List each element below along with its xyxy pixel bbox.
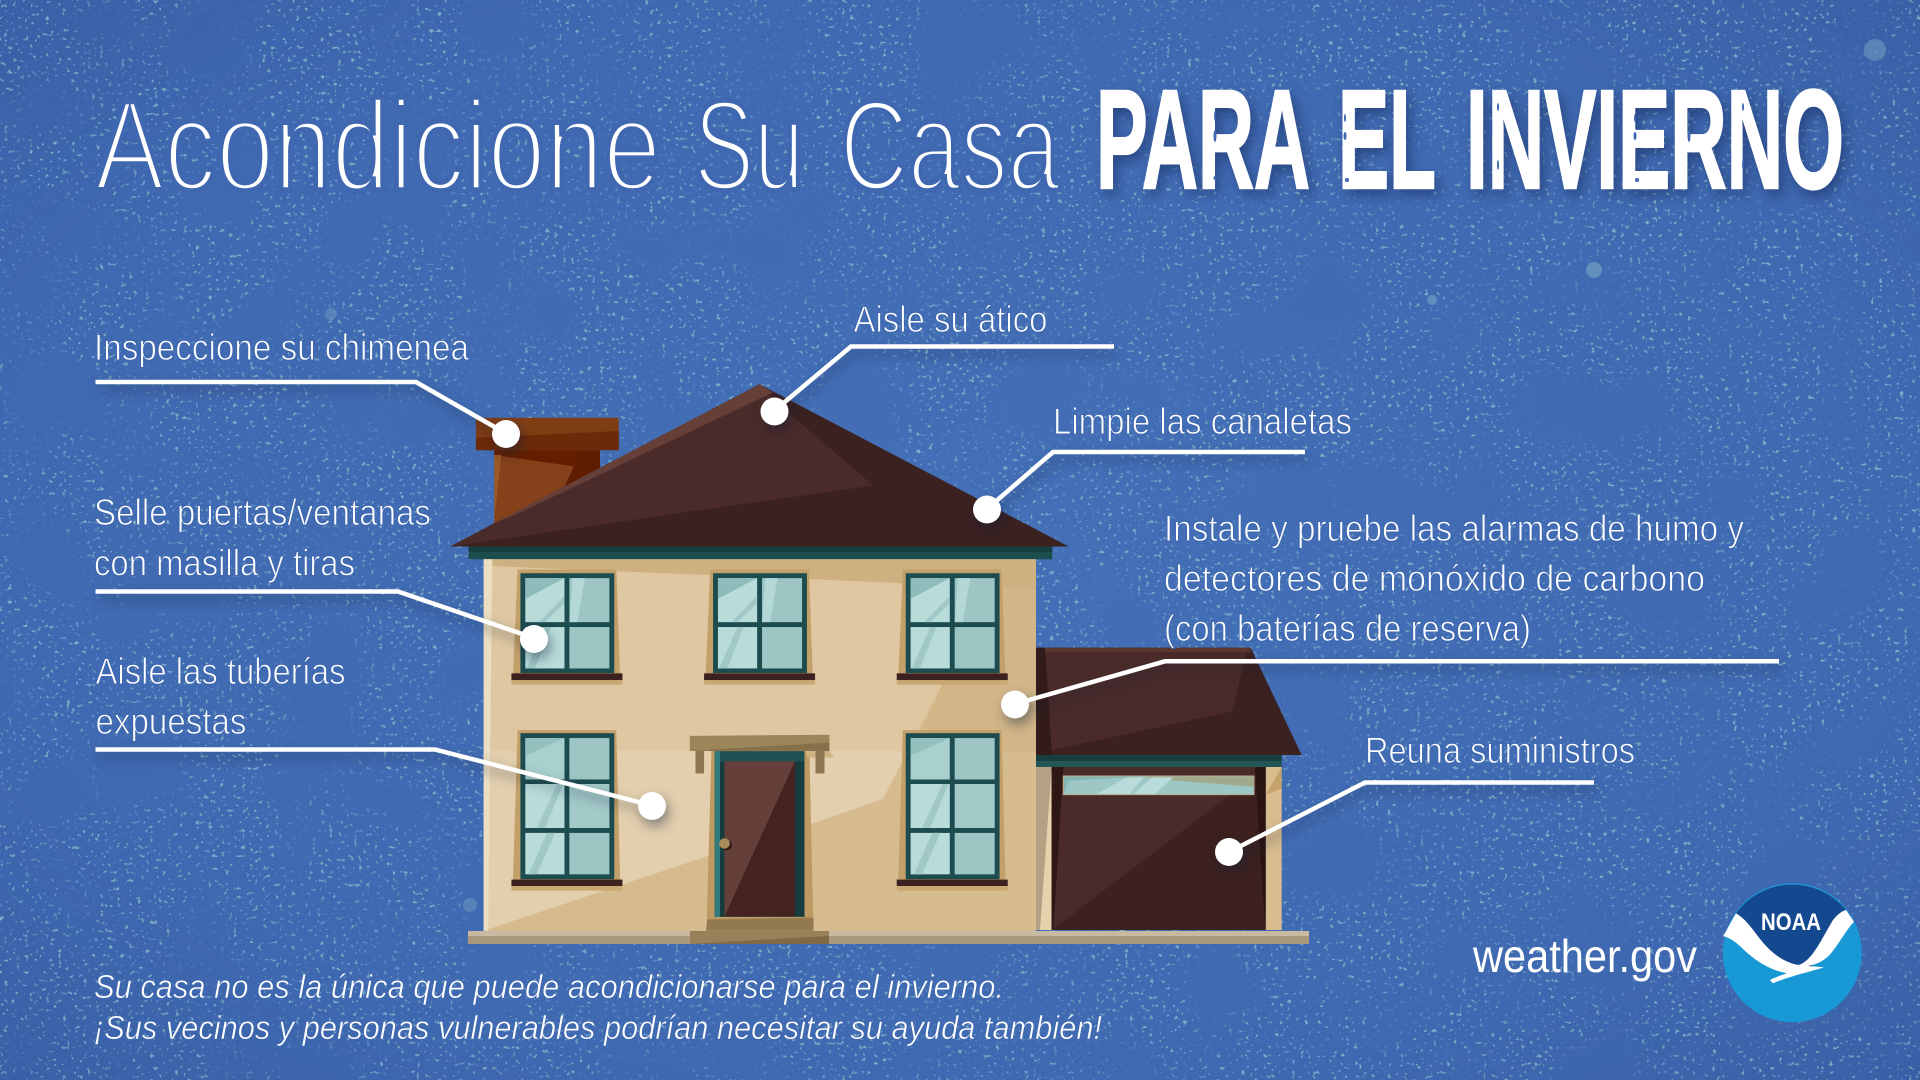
label: Aisle su ático xyxy=(854,299,1048,340)
garage window xyxy=(1063,776,1254,795)
eave band xyxy=(469,547,1052,559)
leader and dot xyxy=(1001,661,1779,718)
garage door xyxy=(1052,767,1266,930)
website: weather.gov xyxy=(1472,930,1697,982)
leader and dot xyxy=(760,346,1114,426)
foundation xyxy=(468,931,1309,944)
callout: attic xyxy=(760,299,1114,426)
window lower left xyxy=(511,730,622,891)
callout: gutters xyxy=(973,401,1352,524)
leader and dot xyxy=(96,592,548,653)
label: Selle puertas/ventanas xyxy=(94,492,431,533)
label: expuestas xyxy=(96,701,246,742)
label: Instale y pruebe las alarmas de humo y xyxy=(1164,508,1744,549)
callout: alarms xyxy=(1001,508,1779,718)
leader and dot xyxy=(96,750,666,820)
door xyxy=(690,735,834,931)
label: Inspeccione su chimenea xyxy=(94,327,469,368)
footer note: ¡Sus vecinos y personas vulnerables podrían necesitar su ayuda también! xyxy=(94,1009,1102,1046)
NOAA logo: NOAA xyxy=(1761,909,1821,936)
callout: supplies xyxy=(1215,730,1635,866)
label: detectores de monóxido de carbono xyxy=(1164,558,1705,599)
title: bold part: PARA xyxy=(1096,60,1310,218)
leader and dot xyxy=(1215,782,1594,866)
wall xyxy=(484,559,1036,931)
title: light part: Casa xyxy=(840,75,1061,218)
window lower right xyxy=(897,730,1008,891)
callout: chimney xyxy=(94,327,520,448)
NOAA logo xyxy=(1723,883,1862,1022)
label: (con baterías de reserva) xyxy=(1164,608,1531,649)
footer note: Su casa no es la única que puede acondicionarse para el invierno. xyxy=(94,968,1004,1005)
title: bold part xyxy=(1096,60,1844,218)
label: Reuna suministros xyxy=(1365,730,1635,771)
garage pillars xyxy=(1036,767,1282,930)
garage roof xyxy=(1036,648,1302,755)
label: Limpie las canaletas xyxy=(1053,401,1352,442)
illustration: house xyxy=(450,384,1309,944)
label: Aisle las tuberías xyxy=(96,651,346,692)
main house body xyxy=(450,384,1069,931)
callout: doors and windows xyxy=(94,492,548,653)
title: bold part: EL xyxy=(1338,60,1436,218)
title: light part: Su xyxy=(694,75,804,218)
title: light part: Acondicione xyxy=(95,75,661,218)
window upper left xyxy=(511,569,622,685)
chimney xyxy=(476,418,619,537)
window upper right xyxy=(897,569,1008,685)
leader and dot xyxy=(973,452,1305,524)
window upper centre xyxy=(704,569,815,685)
leader and dot xyxy=(96,382,520,448)
label: con masilla y tiras xyxy=(94,542,355,584)
upper roof xyxy=(450,384,1069,547)
callout: pipes xyxy=(96,651,666,820)
garage eave band xyxy=(1036,755,1282,767)
title xyxy=(95,60,1844,218)
garage xyxy=(1036,648,1302,930)
